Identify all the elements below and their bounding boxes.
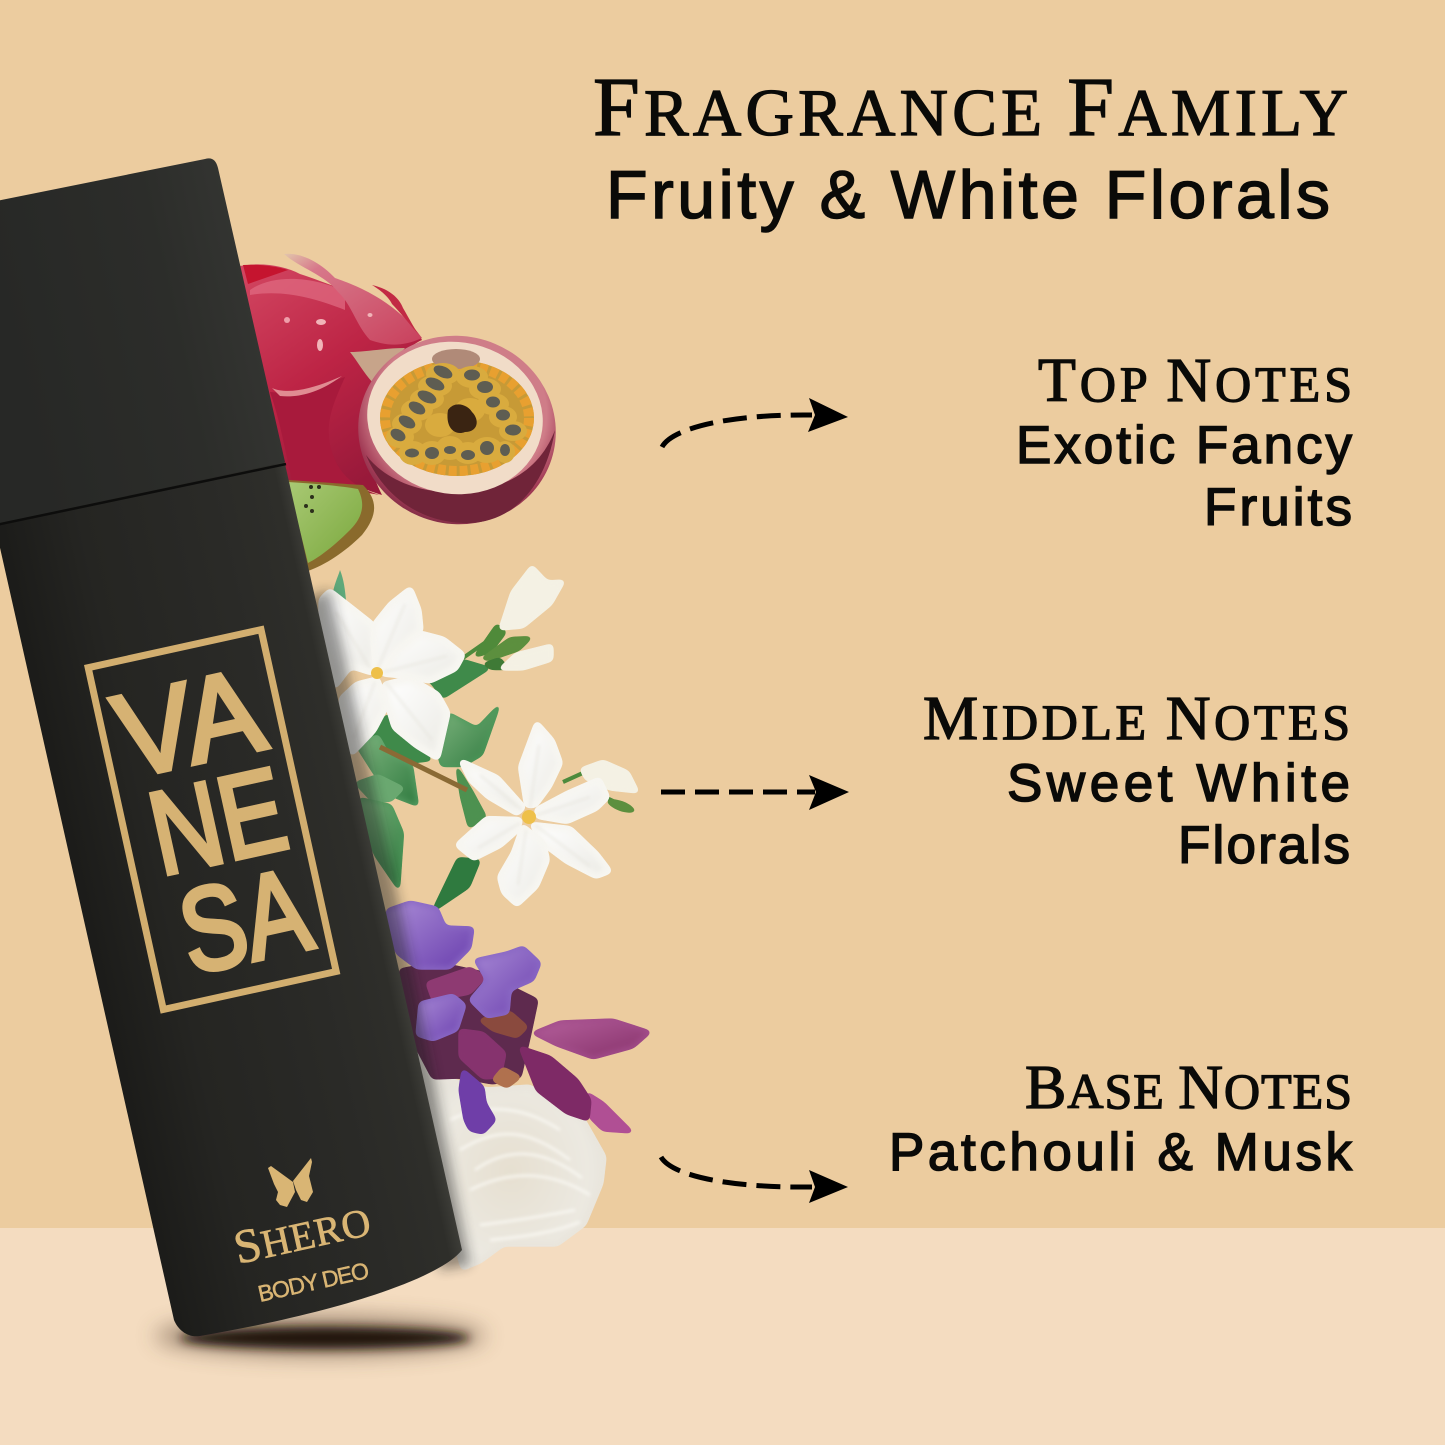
patchouli purple bloom (387, 902, 650, 1133)
logo letters: NE (138, 743, 297, 901)
middle notes heading: MIDDLE NOTES (923, 685, 1350, 753)
jasmine flower two centre (522, 810, 536, 824)
bottle soft shadow on flowers and musk (300, 590, 470, 1270)
logo (88, 630, 336, 1010)
leaves and stems (333, 570, 636, 912)
floor (0, 1228, 1445, 1445)
arrow: middle notes (661, 775, 849, 810)
arrow: base notes (661, 1157, 848, 1203)
product name: SHERO (229, 1193, 375, 1275)
icon: butterfly (268, 1158, 313, 1207)
top notes block (1016, 347, 1352, 537)
dragon fruit (225, 254, 422, 495)
product type: BODY DEO (255, 1257, 371, 1307)
top notes block: Fruits (1204, 478, 1352, 537)
flower two petal veins (478, 745, 590, 885)
top notes ingredients: fruits (225, 254, 573, 571)
top notes text: Exotic Fancy (1016, 416, 1352, 475)
passion fruit (341, 317, 573, 543)
logo letters: SA (168, 843, 322, 1000)
top notes heading: TOP NOTES (1038, 347, 1352, 415)
logo letters (104, 643, 322, 1004)
jasmine flower two (458, 724, 609, 904)
bottle body (0, 455, 462, 1336)
kiwi slice (288, 480, 374, 571)
buds (500, 566, 638, 792)
flower one petal veins (336, 604, 447, 740)
floor shadow halo (155, 1316, 485, 1356)
bottle cap (0, 158, 285, 524)
base notes text: Patchouli & Musk (889, 1123, 1352, 1182)
middle notes text: Sweet White (1007, 754, 1350, 813)
logo letters: VA (104, 644, 275, 804)
middle notes block: Florals (1178, 816, 1350, 875)
arrow: top notes (662, 398, 848, 447)
bottle (0, 158, 462, 1336)
jasmine flower one (322, 590, 462, 757)
musk cotton (417, 1053, 604, 1268)
jasmine flower one centre (371, 667, 383, 679)
floor shadow (180, 1327, 470, 1349)
cap seam (0, 464, 286, 525)
logo frame (88, 630, 336, 1010)
middle notes block (923, 685, 1350, 875)
subheading: Fruity & White Florals: Fruity & White Florals (606, 157, 1330, 233)
heading: Fragrance Family: FRAGRANCE FAMILY (593, 61, 1348, 154)
base notes block (889, 1054, 1352, 1182)
middle notes ingredients: white flowers (322, 566, 638, 912)
base notes heading: BASE NOTES (1025, 1054, 1352, 1122)
base notes ingredients (387, 902, 650, 1268)
